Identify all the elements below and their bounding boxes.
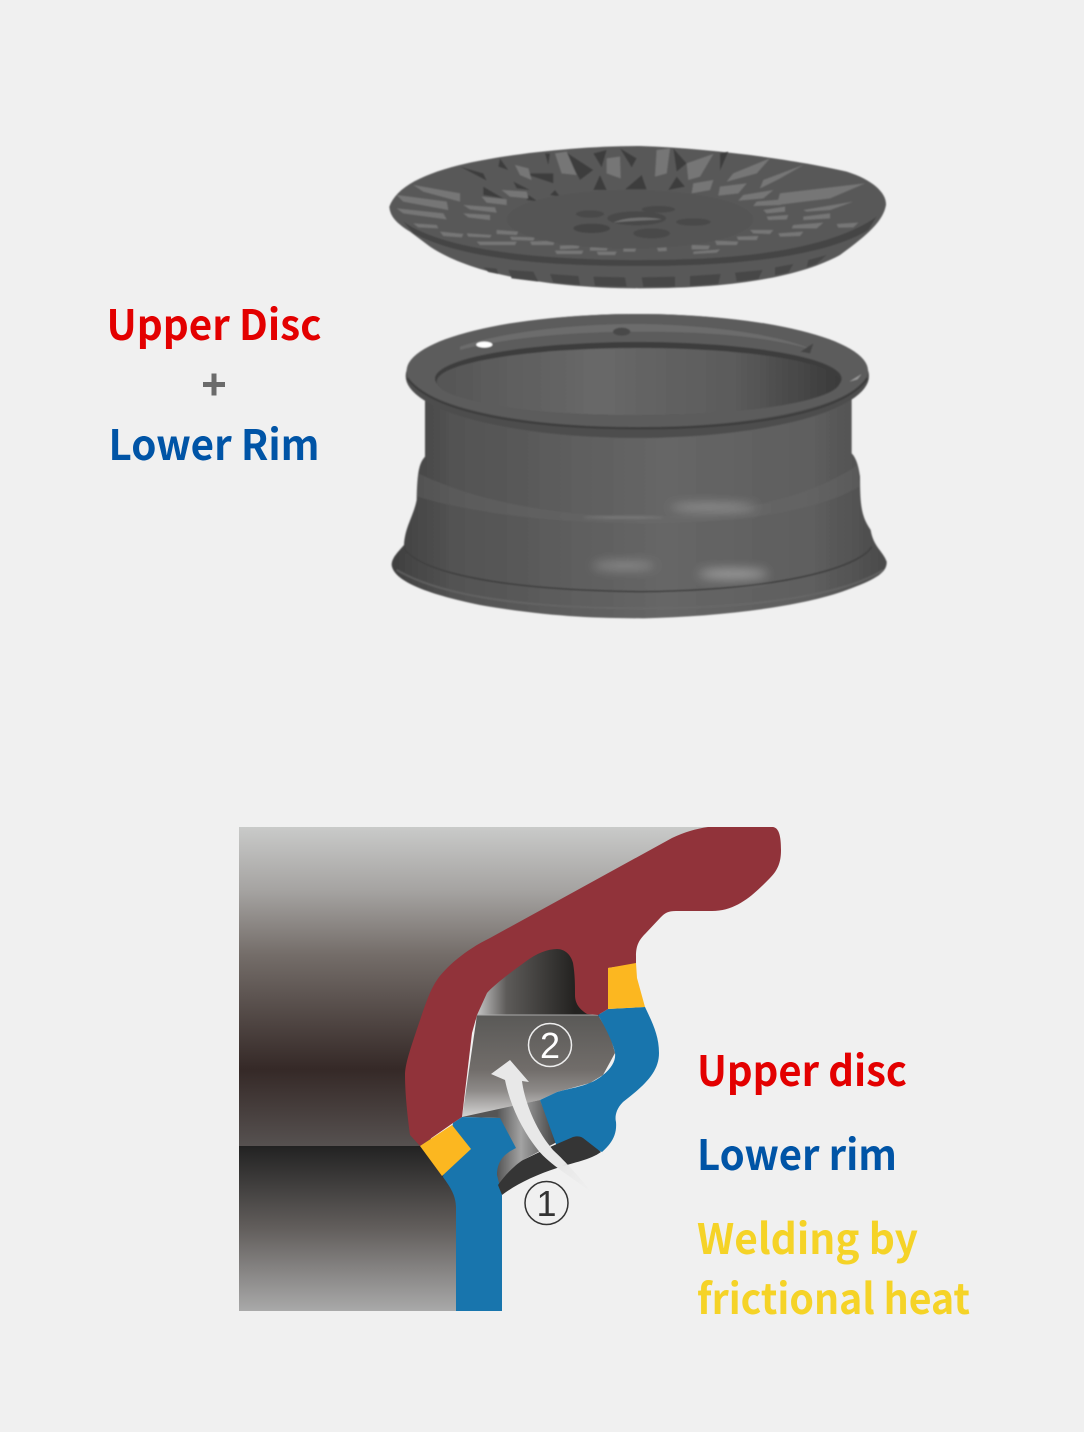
upper face: [407, 314, 868, 427]
background lower panel: [239, 1146, 469, 1311]
plus sign: [203, 374, 225, 396]
gap 2: [462, 1015, 615, 1118]
wheel lower rim: [392, 314, 887, 618]
basket windows: [483, 255, 827, 287]
front lip line: [407, 378, 867, 428]
flange lower line: [397, 570, 883, 608]
valve bump: [613, 328, 630, 336]
weld upper: [608, 963, 645, 1009]
cross-section diagram: [239, 827, 781, 1311]
hub face: [507, 190, 753, 249]
rim spoke section: [443, 1117, 516, 1311]
flange groove: [404, 547, 872, 592]
bolt holes: [573, 206, 711, 238]
number 1: 1: [536, 1183, 557, 1224]
dark band: [498, 1136, 601, 1195]
gap 1: [462, 1100, 557, 1185]
flow arrow: [491, 1060, 592, 1193]
disc silhouette: [389, 146, 886, 288]
inner cavity: [470, 945, 600, 1020]
number 1: [525, 1182, 568, 1224]
rim body: [392, 397, 887, 618]
upper disc section: [405, 827, 781, 1146]
rim outer flange: [540, 1007, 659, 1152]
weld lower: [420, 1125, 471, 1176]
disc lip: [403, 217, 877, 266]
inner barrel opening: [435, 342, 842, 415]
heading: Upper Disc: Upper Disc: [106, 292, 322, 353]
legend: upper disc: Upper disc: [697, 1038, 907, 1099]
valve hole: [476, 342, 492, 348]
lower rim section: [443, 1007, 659, 1311]
top seat highlight: [460, 324, 813, 350]
gap highlight line: [477, 1014, 598, 1016]
top rim ring: [406, 314, 869, 438]
legend: welding line 2: frictional heat: [697, 1266, 970, 1327]
legend: lower rim: Lower rim: [697, 1122, 897, 1183]
rim highlights: [583, 504, 768, 579]
background upper panel: [239, 827, 715, 1146]
spoke dark gaps: [460, 148, 728, 202]
heading: Lower Rim: Lower Rim: [108, 412, 320, 473]
legend: welding line 1: Welding by: [697, 1206, 918, 1267]
number 2: [528, 1024, 572, 1066]
number 2: 2: [540, 1025, 560, 1066]
spoke highlights: [397, 148, 865, 255]
inner barrel wall: [437, 348, 840, 415]
right notch: [801, 343, 813, 353]
mid ridge band: [417, 465, 859, 523]
right tab: [849, 374, 862, 382]
wheel upper disc: [389, 146, 886, 288]
